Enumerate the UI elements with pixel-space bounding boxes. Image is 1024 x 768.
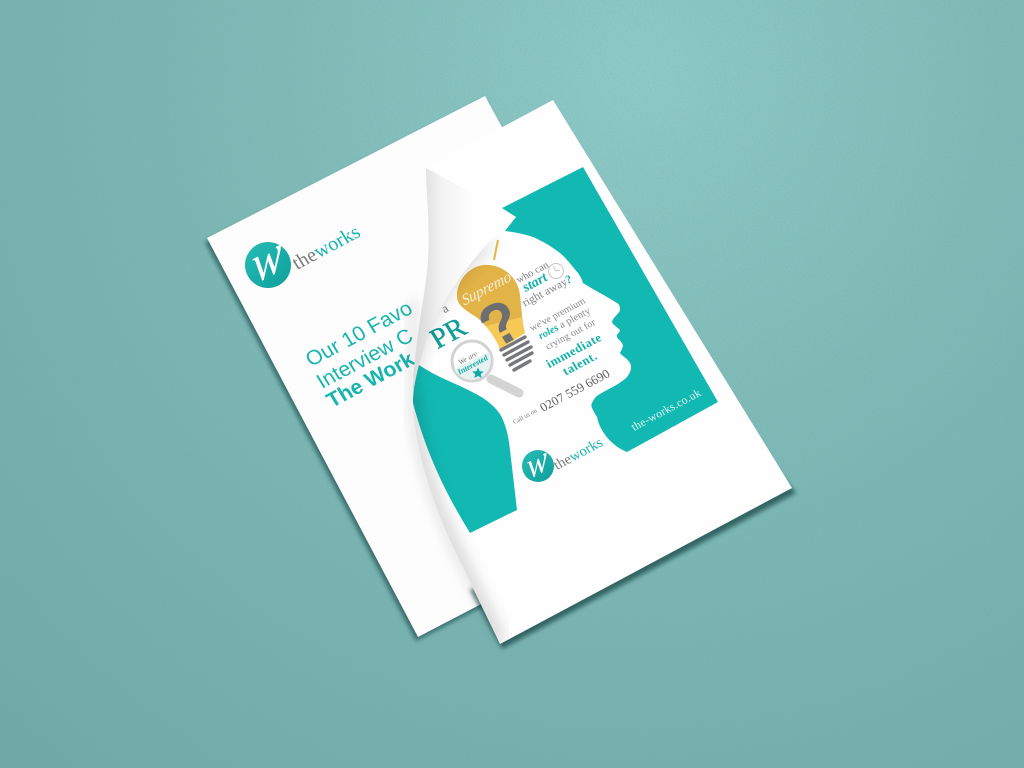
- call to action: phone number: [513, 370, 610, 424]
- heading: interview: Interview C: [313, 324, 417, 393]
- text block: premium roles: talent.: [560, 349, 600, 378]
- curl shadow on page: [414, 242, 492, 398]
- page curl flap: [413, 168, 516, 400]
- icon: light bulb: Supremo: [460, 268, 514, 310]
- heading: interview: Our 10 Favo: [302, 297, 417, 371]
- text block: who can start right away: [516, 263, 570, 307]
- teal shoulder: [412, 362, 517, 533]
- logo: back sheet: [245, 221, 365, 296]
- icon: magnifying glass: [452, 341, 519, 393]
- icon: magnifying glass: We are: [456, 349, 480, 366]
- text block: who can start right away: right away?: [520, 273, 575, 309]
- logo: front sheet: [522, 440, 603, 482]
- panel: back sheet: [205, 96, 700, 641]
- logo: back sheet: theworks: [288, 221, 365, 274]
- call to action: phone number: 0207 559 6690: [537, 367, 612, 415]
- headline fragment: [428, 306, 469, 349]
- panel: front sheet: [400, 100, 792, 644]
- text block: premium roles: roles a plenty: [537, 305, 593, 342]
- text block: who can start right away: who can: [514, 260, 552, 286]
- text block: premium roles: crying out for: [544, 317, 598, 352]
- text block: premium roles: we've premium: [528, 296, 588, 334]
- left edge shading: [413, 395, 500, 644]
- URL: the-works.co.uk: [629, 387, 704, 434]
- logo: back sheet: w: [248, 223, 287, 296]
- headline fragment: a: [438, 300, 451, 316]
- call to action: phone number: Call us on: [512, 407, 539, 426]
- text block: premium roles: immediate: [543, 330, 604, 371]
- headline fragment: PR: [424, 311, 473, 355]
- icon: light bulb: [457, 240, 534, 370]
- heading: interview: The Work: [323, 348, 419, 412]
- text block: who can start right away: start: [519, 270, 551, 296]
- text block: premium roles: [530, 299, 602, 375]
- icon: magnifying glass: Interested: [455, 353, 490, 377]
- teal background with face profile: [502, 167, 718, 452]
- bulb screw base: [501, 337, 532, 370]
- heading: interview: [302, 297, 419, 412]
- poster artwork: [400, 167, 718, 644]
- logo: front sheet: theworks: [551, 435, 606, 473]
- icon: light bulb: ?: [466, 286, 534, 361]
- panel: front sheet shadow: [413, 300, 796, 649]
- logo: front sheet: w: [524, 437, 551, 487]
- icon: clock: [548, 264, 564, 278]
